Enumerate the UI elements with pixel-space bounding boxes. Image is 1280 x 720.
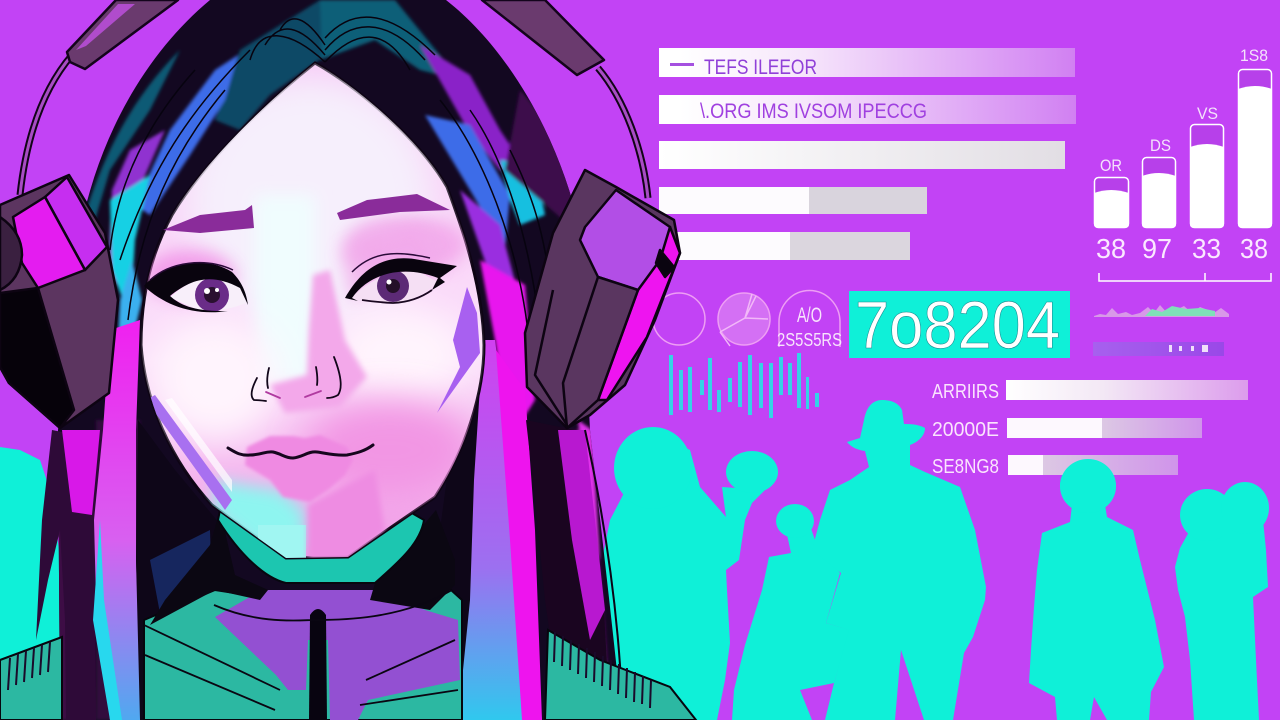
shoulder hatching: [8, 632, 651, 708]
column top labels: VS: [1197, 104, 1218, 123]
bar 2: [659, 95, 1076, 124]
right cup magenta side: [598, 227, 680, 400]
column top labels: DS: [1150, 136, 1171, 155]
lips: [245, 435, 353, 502]
left upper magenta strand: [62, 430, 100, 515]
mouth line: [228, 445, 373, 458]
silhouette: man in hat: [812, 400, 986, 720]
circle 1: [653, 293, 705, 345]
column 4: [1238, 70, 1272, 228]
headband wire highlight: [20, 55, 648, 198]
silhouette: woman in coat: [1029, 459, 1164, 720]
silhouette: figure with raised hand: [600, 427, 778, 720]
chart axis: [1099, 273, 1271, 281]
right magenta accent: [558, 430, 605, 640]
right eyebrow: [337, 194, 450, 220]
right cup black stripe: [656, 250, 674, 277]
headband wires: [20, 55, 648, 198]
jacket collar dark: [150, 510, 455, 625]
right thin strand line: [585, 430, 622, 700]
left cup strip: [45, 177, 107, 270]
left cup magenta face: [13, 197, 85, 288]
circle charts: [653, 290, 842, 350]
left eyebrow: [163, 205, 254, 233]
collar lines: [144, 590, 458, 710]
big number box: 7o8204: [855, 288, 1060, 363]
circle 3: arch gauge with text: [777, 290, 842, 350]
hair base: [58, 0, 622, 720]
labelled lower bars: [932, 380, 1248, 513]
column top labels: 1S8: [1240, 46, 1268, 65]
lower bar 3: SE8NG8: [932, 456, 999, 478]
hair: [40, 0, 622, 720]
left cup body: [0, 175, 118, 428]
face: [141, 63, 484, 560]
circle 2: pie: [718, 293, 770, 346]
bar 4: [659, 187, 927, 214]
column 1: [1094, 178, 1129, 228]
teal waveform: [669, 353, 819, 418]
nose: [252, 357, 341, 401]
column bottom labels: 33: [1192, 233, 1221, 264]
right dark strands: [526, 420, 610, 720]
lower bar 1: ARRIIRS: [932, 381, 999, 403]
left magenta strip: [94, 320, 142, 720]
hair strips left: [36, 320, 225, 720]
left cup black side: [0, 288, 74, 428]
column bottom labels: 97: [1142, 233, 1172, 264]
lower bar 2: 20000E: [932, 419, 999, 441]
zipper: [309, 609, 327, 720]
face base shape: [141, 63, 484, 558]
neck teal: [218, 510, 424, 583]
right black strands: [436, 400, 478, 720]
hair strips right: [436, 340, 622, 720]
right magenta strip: [496, 350, 542, 720]
left dark strands: [36, 430, 102, 720]
right cup lilac top: [580, 190, 670, 290]
right headphone earcup: [525, 170, 680, 428]
silhouette: figure on the right: [1175, 482, 1269, 720]
lower bar 1: [932, 380, 1248, 403]
jacket base: [0, 580, 696, 720]
silhouette head overlap: [1060, 459, 1116, 513]
silhouette crowd: [0, 400, 1269, 720]
right band pad: [482, 0, 604, 75]
silhouette: small figure: [732, 504, 850, 720]
hair colour washes: [40, 0, 612, 720]
column bottom labels: 38: [1096, 233, 1126, 264]
right cup dark highlight: [563, 277, 638, 428]
left headphone earcup: [0, 175, 118, 428]
right lilac strip: [458, 340, 542, 720]
face shading: [145, 75, 480, 560]
column top labels: [1100, 46, 1268, 175]
column 3: [1190, 124, 1224, 228]
silhouette: far-left figure: [0, 447, 70, 720]
right cup inner edge: [535, 290, 567, 425]
bar 2: \.ORG IMS IVSOM IPECCG: [700, 100, 927, 123]
left cyan highlight: [93, 520, 122, 720]
lower bar 2: [932, 418, 1202, 441]
left band pad: [67, 0, 178, 69]
column bottom labels: [1096, 233, 1268, 264]
circle 3: arch gauge with text: 2S5S5RS: [777, 330, 842, 350]
bar 3: [659, 141, 1065, 169]
right cup body: [525, 170, 680, 428]
mini sparkline: [1094, 305, 1229, 317]
panel: horizontal progress bars: [659, 48, 1076, 260]
headband: [20, 0, 648, 198]
left cup hub: [0, 217, 22, 290]
left black hair: [136, 420, 225, 720]
circle 3: arch gauge with text: A/O: [797, 304, 822, 327]
lower bar 3: [932, 455, 1178, 478]
purple slider with dots: [1093, 342, 1224, 356]
bar 5: [659, 232, 910, 260]
jacket and neck: [0, 510, 696, 720]
bar 1: TEFS ILEEOR: [704, 56, 817, 79]
left eye: [144, 263, 248, 312]
right eye: [345, 254, 457, 303]
shirt purple: [215, 590, 460, 720]
bar 1: [659, 48, 1075, 79]
column chart: [1094, 46, 1272, 281]
column top labels: OR: [1100, 156, 1122, 175]
left blue strands: [150, 530, 212, 640]
hair strand lines: [110, 17, 552, 350]
column 2: [1142, 158, 1176, 228]
column bottom labels: 38: [1240, 233, 1268, 264]
